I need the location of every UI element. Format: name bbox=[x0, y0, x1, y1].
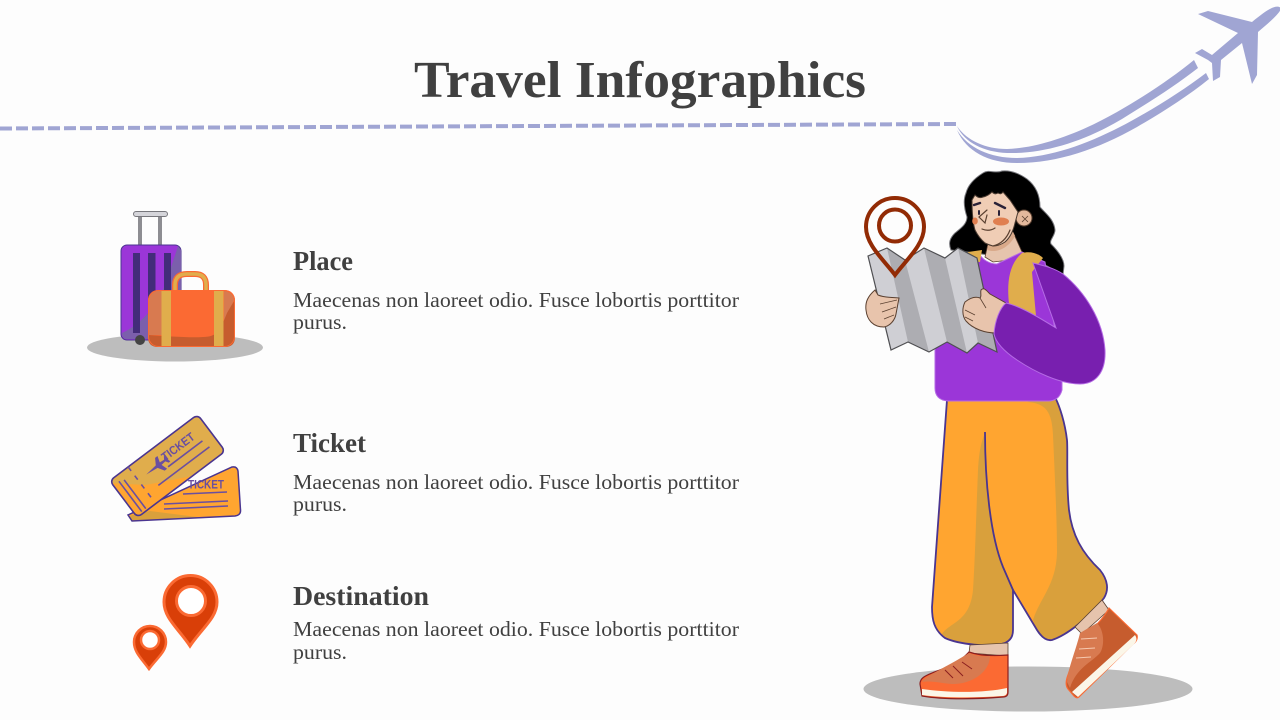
right shoe bbox=[1066, 600, 1137, 698]
ear bbox=[1016, 210, 1032, 226]
ground shadow bbox=[864, 666, 1192, 712]
heading: ticket: Ticket bbox=[293, 428, 366, 458]
facial features bbox=[972, 203, 1010, 246]
face bbox=[972, 192, 1018, 246]
title: Travel Infographics bbox=[414, 52, 866, 109]
neck bbox=[985, 232, 1022, 262]
icon: map pins bbox=[134, 576, 217, 669]
illustration: traveller with map bbox=[864, 171, 1192, 712]
icon: airplane with trail bbox=[957, 7, 1280, 163]
shirt bbox=[935, 252, 1062, 401]
icon: tickets bbox=[110, 415, 241, 521]
text block: destination: Maecenas non laoreet odio. Fusce lobortis porttitor bbox=[293, 617, 739, 641]
text block: destination: purus. bbox=[293, 640, 347, 664]
text block: place: Maecenas non laoreet odio. Fusce lobortis porttitor bbox=[293, 288, 739, 312]
panel: place bbox=[87, 212, 739, 362]
folded map bbox=[868, 248, 997, 353]
icon: location pin outline bbox=[866, 198, 924, 275]
icon: luggage bbox=[87, 212, 263, 362]
front ticket: TICKET bbox=[159, 429, 198, 464]
right hand bbox=[963, 289, 1006, 333]
hair bbox=[950, 171, 1064, 275]
back ticket: TICKET bbox=[188, 478, 225, 492]
text block: ticket: purus. bbox=[293, 492, 347, 516]
trousers bbox=[932, 397, 1107, 645]
dashed flight path bbox=[0, 124, 957, 128]
backpack strap bbox=[968, 250, 1043, 316]
left hand bbox=[866, 290, 899, 327]
heading: destination: Destination bbox=[293, 581, 429, 611]
heading: place: Place bbox=[293, 246, 353, 276]
sleeve bbox=[994, 263, 1105, 384]
text block: ticket: Maecenas non laoreet odio. Fusce lobortis porttitor bbox=[293, 470, 739, 494]
left shoe bbox=[920, 643, 1008, 699]
text block: place: purus. bbox=[293, 310, 347, 334]
panel: destination bbox=[134, 576, 739, 669]
panel: ticket bbox=[110, 415, 739, 521]
